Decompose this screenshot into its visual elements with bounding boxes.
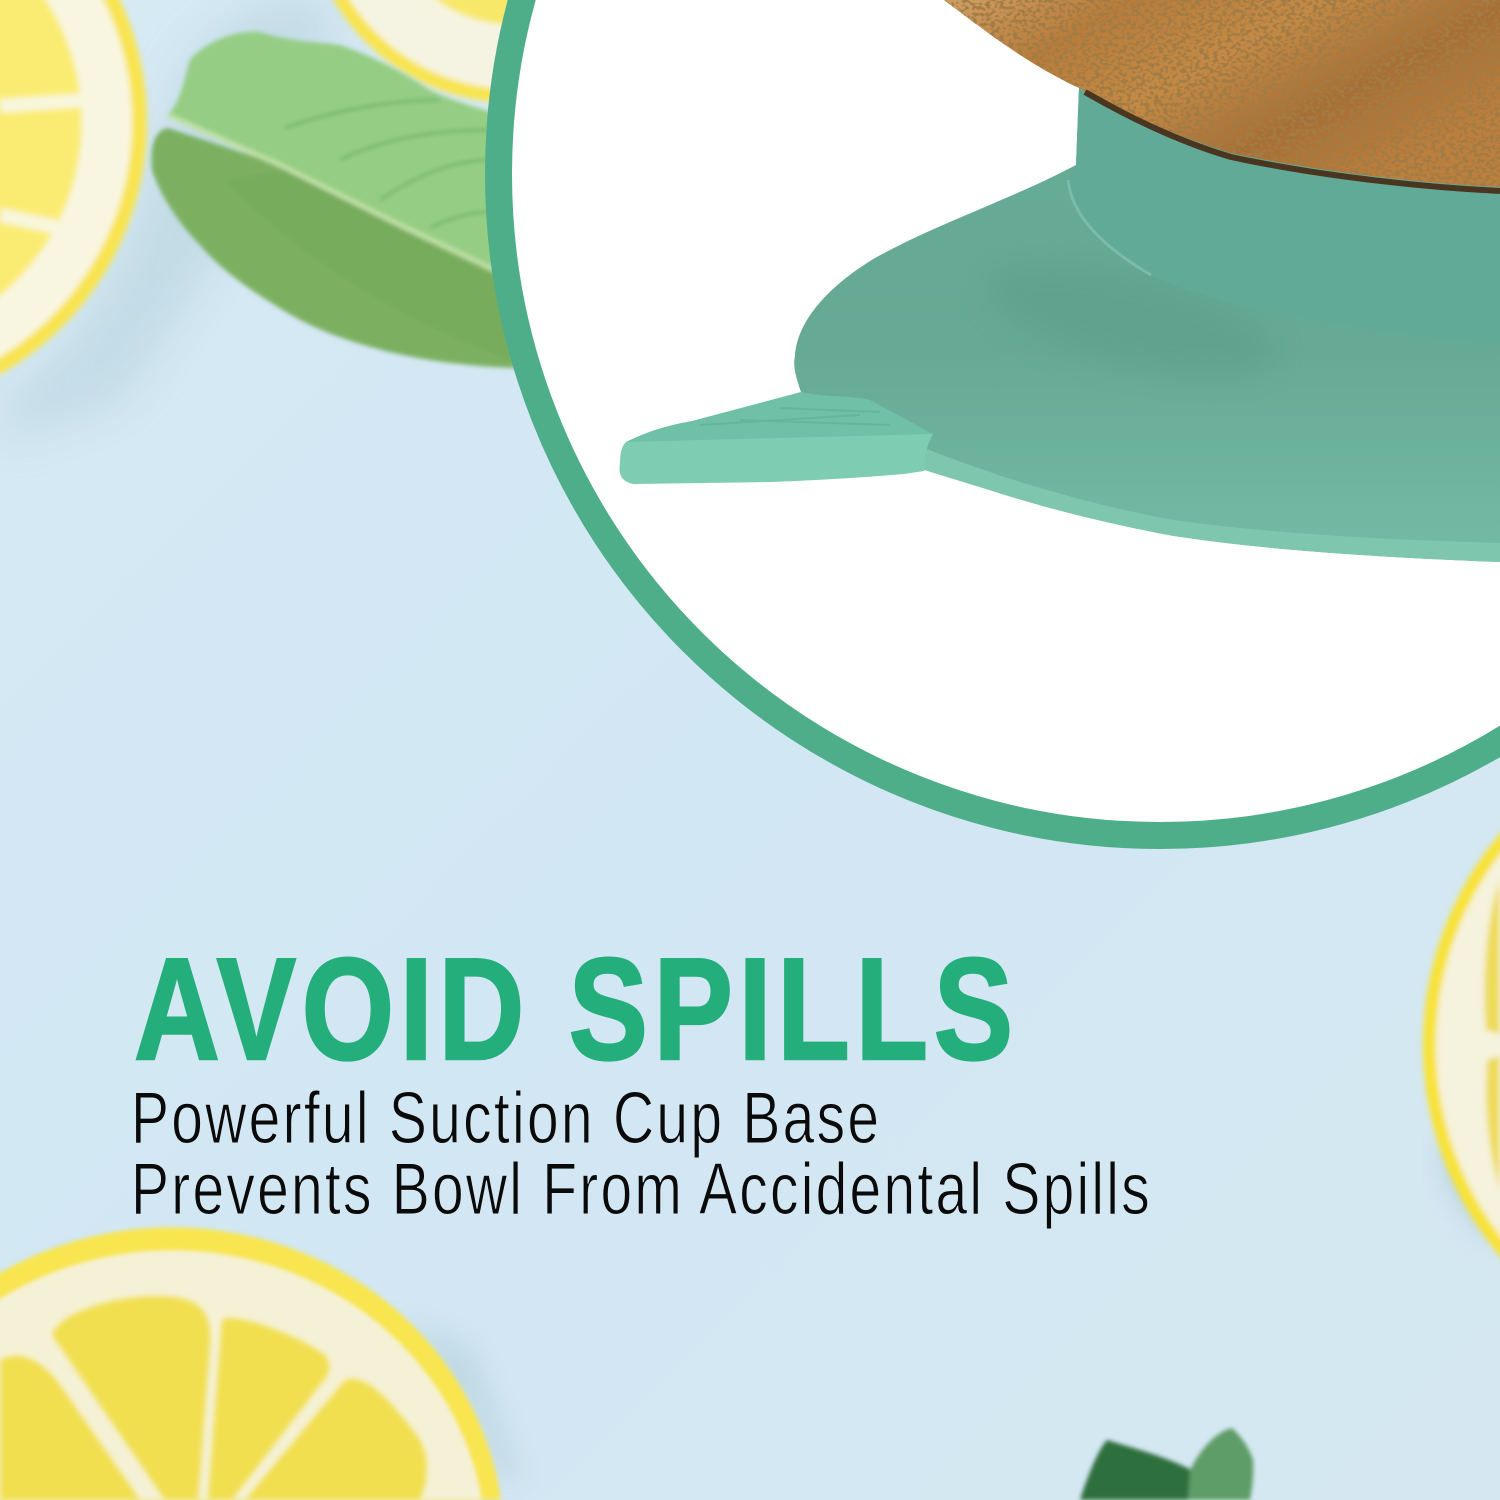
lemon rind [0,1227,501,1500]
lemon slice: right [1423,717,1500,1373]
description text [131,1077,1150,1230]
description text: Powerful Suction Cup Base [131,1077,879,1159]
bamboo bowl [944,0,1500,191]
description text: Prevents Bowl From Accidental Spills [131,1148,1150,1230]
lemon slice: bottom left [0,1227,501,1500]
lemon slice: top centre [305,0,721,103]
lemon slice: top left [0,0,147,412]
mint leaves: bottom [1080,1428,1253,1500]
mint leaf [152,32,515,368]
suction cup stem [1076,88,1080,166]
heading: AVOID SPILLS [134,929,1013,1091]
leaf lower half [152,128,515,368]
callout circle [498,0,1500,836]
leaf upper half [168,32,515,280]
lemon segments [0,1296,427,1500]
suction cup disc [794,88,1500,562]
suction cup bottom rim [924,448,1500,562]
suction cup tab [620,392,933,484]
lemon pith [0,1250,482,1500]
